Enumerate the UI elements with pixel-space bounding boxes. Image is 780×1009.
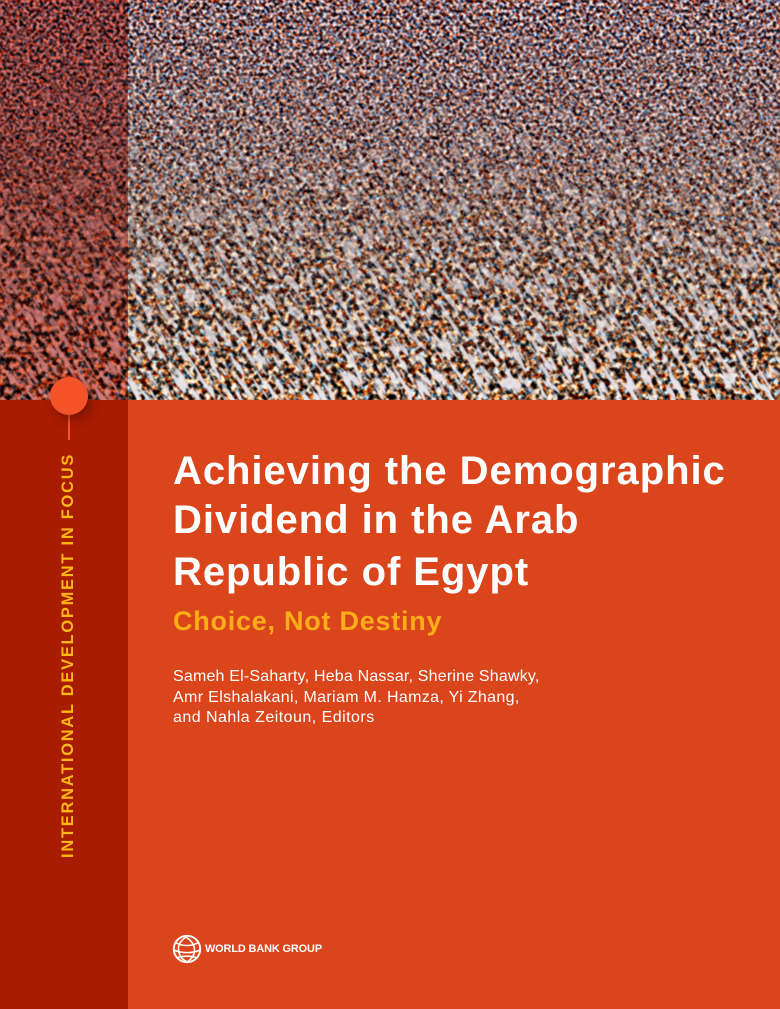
authors bbox=[173, 668, 540, 726]
authors: Amr Elshalakani, Mariam M. Hamza, Yi Zhang, bbox=[173, 689, 520, 706]
title: Dividend in the Arab bbox=[173, 498, 579, 542]
photo: aerial view of crowd bbox=[0, 0, 780, 400]
subtitle: Choice, Not Destiny bbox=[173, 606, 442, 636]
logo: World Bank Group: WORLD BANK GROUP bbox=[205, 943, 322, 955]
icon: orange circle with stem bbox=[50, 377, 96, 440]
spine label: INTERNATIONAL DEVELOPMENT IN FOCUS bbox=[59, 453, 77, 858]
authors: Sameh El-Saharty, Heba Nassar, Sherine Shawky, bbox=[173, 668, 540, 685]
title: Achieving the Demographic bbox=[173, 449, 726, 493]
logo: World Bank Group bbox=[172, 934, 322, 964]
authors: and Nahla Zeitoun, Editors bbox=[173, 709, 375, 726]
icon: globe bbox=[172, 934, 202, 964]
panel: red spine bbox=[0, 400, 128, 1009]
title bbox=[173, 449, 726, 594]
title: Republic of Egypt bbox=[173, 550, 529, 594]
panel: red tinted photo strip bbox=[0, 0, 128, 400]
